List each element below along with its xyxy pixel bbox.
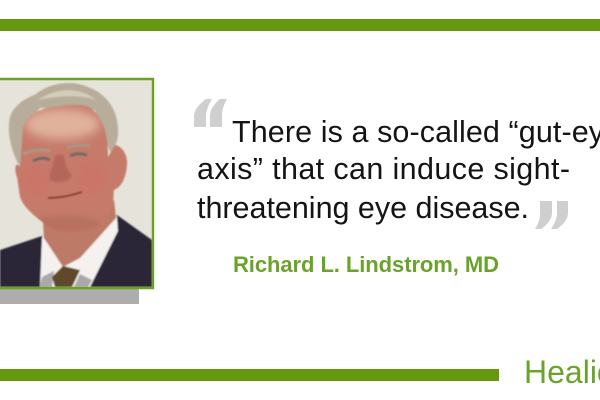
quote text: axis” that can induce sight- [197,152,570,186]
closing quotation mark [535,201,568,229]
nose [50,155,72,182]
shirt collar [40,216,118,287]
suit [0,215,152,287]
quote text: There is a so-called “gut-ey [232,115,600,149]
top green bar [0,19,600,31]
forehead highlight [24,109,100,139]
mouth [48,192,82,198]
tie [52,266,80,287]
opening quotation mark [194,99,227,127]
neck [43,200,116,267]
cheek right [78,162,106,194]
bottom green bar [0,369,499,381]
eyes [33,154,87,161]
cheek left [22,166,50,194]
portrait photo [0,79,153,288]
photo frame [0,79,153,288]
chin shade [40,216,98,232]
eyebrows [23,145,90,154]
face [14,104,128,230]
hair [9,83,118,167]
quote text: threatening eye disease. [197,191,529,225]
shirt stripes [40,271,92,287]
photo drop shadow [0,288,139,304]
attribution name: Richard L. Lindstrom, MD [233,252,499,277]
hair highlight [38,90,96,100]
quote text [197,115,600,225]
